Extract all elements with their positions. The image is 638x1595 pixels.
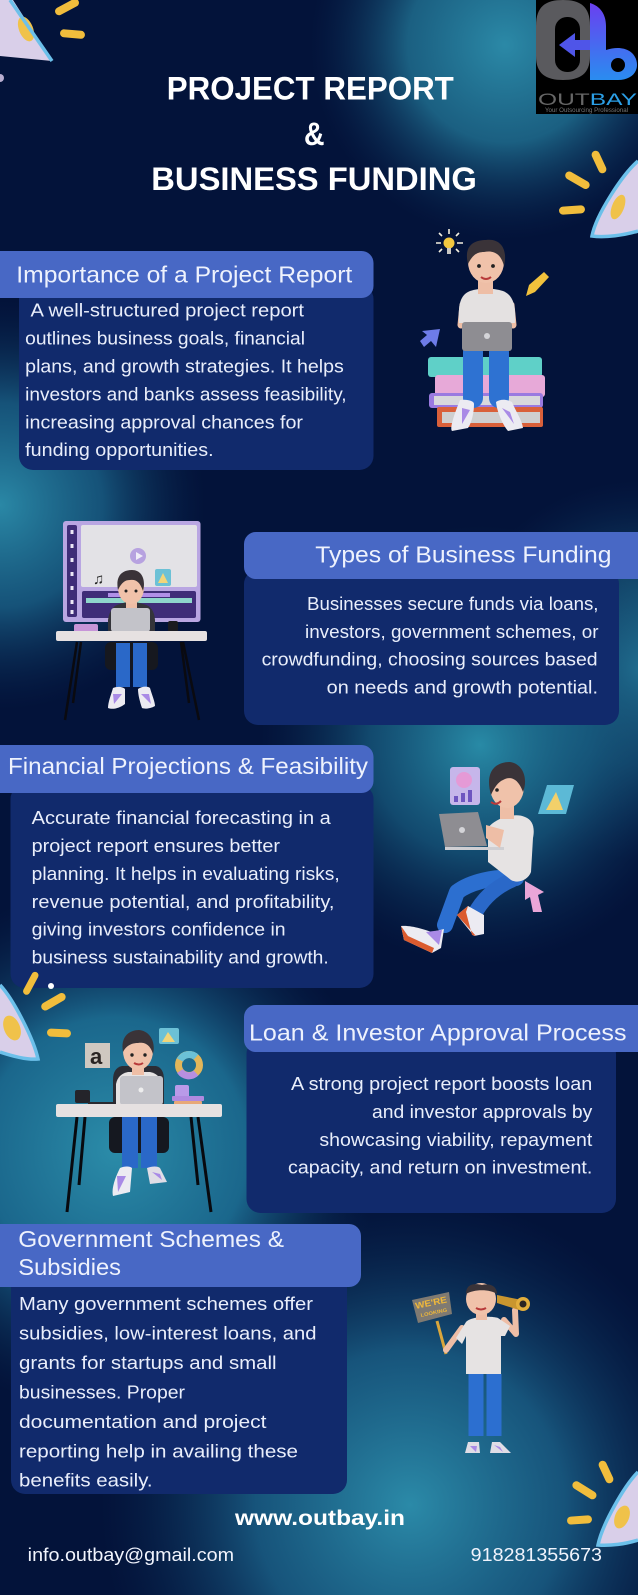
panel: types of business funding <box>244 532 638 725</box>
panel: financial projections and feasibility: giving investors confidence in <box>32 920 286 940</box>
panel: types of business funding: investors, government schemes, or <box>305 622 598 642</box>
panel: financial projections and feasibility: project report ensures better <box>32 836 280 856</box>
heading: government schemes and subsidies: Subsidies <box>18 1254 121 1280</box>
panel: financial projections and feasibility: Accurate financial forecasting in a <box>32 808 332 828</box>
panel: types of business funding: on needs and growth potential. <box>327 678 598 698</box>
panel: importance of a project report: increasing approval chances for <box>25 412 303 432</box>
heading: financial projections and feasibility <box>0 745 374 793</box>
icon: donut chart <box>178 1054 200 1076</box>
logo: Outbay: Your Outsourcing Professional <box>545 108 628 114</box>
logo: Outbay: OUT BAY <box>538 90 637 109</box>
panel: types of business funding: Businesses secure funds via loans, <box>307 594 598 614</box>
icon: pencil <box>526 272 549 296</box>
icon: letter card <box>85 1043 110 1069</box>
icon: light bulb <box>436 229 463 254</box>
heading: types of business funding <box>244 532 638 579</box>
footer: website: www.outbay.in <box>234 1507 405 1530</box>
illustration: flying person with laptop <box>401 762 574 953</box>
icon: picture card <box>159 1028 179 1044</box>
panel: loan and investor approval process: and investor approvals by <box>372 1102 592 1122</box>
heading: importance of a project report <box>0 251 374 298</box>
icon: dashboard card <box>450 767 480 805</box>
icon: we're looking sign <box>412 1292 452 1354</box>
icon: we're looking sign: LOOKING <box>420 1307 448 1319</box>
panel: government schemes and subsidies: documentation and project <box>19 1412 266 1432</box>
heading: financial projections and feasibility: Financial Projections & Feasibility <box>8 753 369 779</box>
title: & <box>304 116 324 152</box>
illustration: person on stacked books <box>420 229 549 431</box>
title: BUSINESS FUNDING <box>151 161 477 197</box>
panel: financial projections and feasibility <box>0 745 374 988</box>
title <box>151 70 477 197</box>
panel: government schemes and subsidies: grants for startups and small <box>19 1353 277 1373</box>
panel: importance of a project report <box>0 251 374 470</box>
panel: importance of a project report: funding opportunities. <box>25 440 214 460</box>
footer: email: info.outbay@gmail.com <box>28 1545 234 1565</box>
heading: loan and investor approval process: Loan & Investor Approval Process <box>249 1020 626 1046</box>
panel: government schemes and subsidies: businesses. Proper <box>19 1382 185 1402</box>
illustration: person at desk with laptop and icons <box>56 1028 222 1212</box>
panel: financial projections and feasibility: planning. It helps in evaluating risks, <box>32 864 340 884</box>
logo: Outbay <box>536 0 638 114</box>
icon: bottom-right megaphone <box>567 1459 638 1545</box>
icon: left megaphone <box>0 971 71 1059</box>
heading: government schemes and subsidies <box>0 1224 361 1287</box>
icon: pink arrow <box>525 881 544 912</box>
illustration: person at desk with video editing screen <box>56 521 207 720</box>
panel: loan and investor approval process: A strong project report boosts loan <box>291 1074 592 1094</box>
panel: importance of a project report: A well-structured project report <box>30 300 304 320</box>
icon: top-left megaphone <box>0 0 85 82</box>
heading: importance of a project report: Importance of a Project Report <box>16 261 353 287</box>
illustration: person with sign and binoculars <box>412 1283 530 1453</box>
icon: we're looking sign: WE'RE <box>414 1295 448 1311</box>
panel: importance of a project report: plans, and growth strategies. It helps <box>25 356 344 376</box>
panel: loan and investor approval process <box>244 1005 638 1213</box>
heading: loan and investor approval process <box>244 1005 638 1052</box>
panel: government schemes and subsidies: benefits easily. <box>19 1471 153 1491</box>
panel: government schemes and subsidies: subsidies, low-interest loans, and <box>19 1323 316 1343</box>
icon: purple arrow <box>420 329 440 347</box>
icon: right megaphone <box>559 149 638 237</box>
illustration: person at desk with video editing screen: ♫ <box>93 571 104 588</box>
panel: importance of a project report: investors and banks assess feasibility, <box>25 384 347 404</box>
panel: importance of a project report: outlines business goals, financial <box>25 328 305 348</box>
panel: types of business funding: crowdfunding, choosing sources based <box>262 650 598 670</box>
panel: financial projections and feasibility: revenue potential, and profitability, <box>32 892 334 912</box>
icon: letter card: a <box>90 1044 103 1069</box>
heading: government schemes and subsidies: Government Schemes & <box>18 1226 284 1252</box>
panel: government schemes and subsidies: Many government schemes offer <box>19 1294 313 1314</box>
heading: types of business funding: Types of Business Funding <box>315 542 612 568</box>
title: PROJECT REPORT <box>167 70 454 106</box>
panel: government schemes and subsidies <box>0 1224 361 1494</box>
panel: loan and investor approval process: showcasing viability, repayment <box>319 1130 592 1150</box>
panel: financial projections and feasibility: business sustainability and growth. <box>32 948 329 968</box>
panel: government schemes and subsidies: reporting help in availing these <box>19 1442 298 1462</box>
icon: picture card <box>538 785 574 814</box>
panel: loan and investor approval process: capacity, and return on investment. <box>288 1158 592 1178</box>
footer: phone: 918281355673 <box>471 1545 602 1565</box>
